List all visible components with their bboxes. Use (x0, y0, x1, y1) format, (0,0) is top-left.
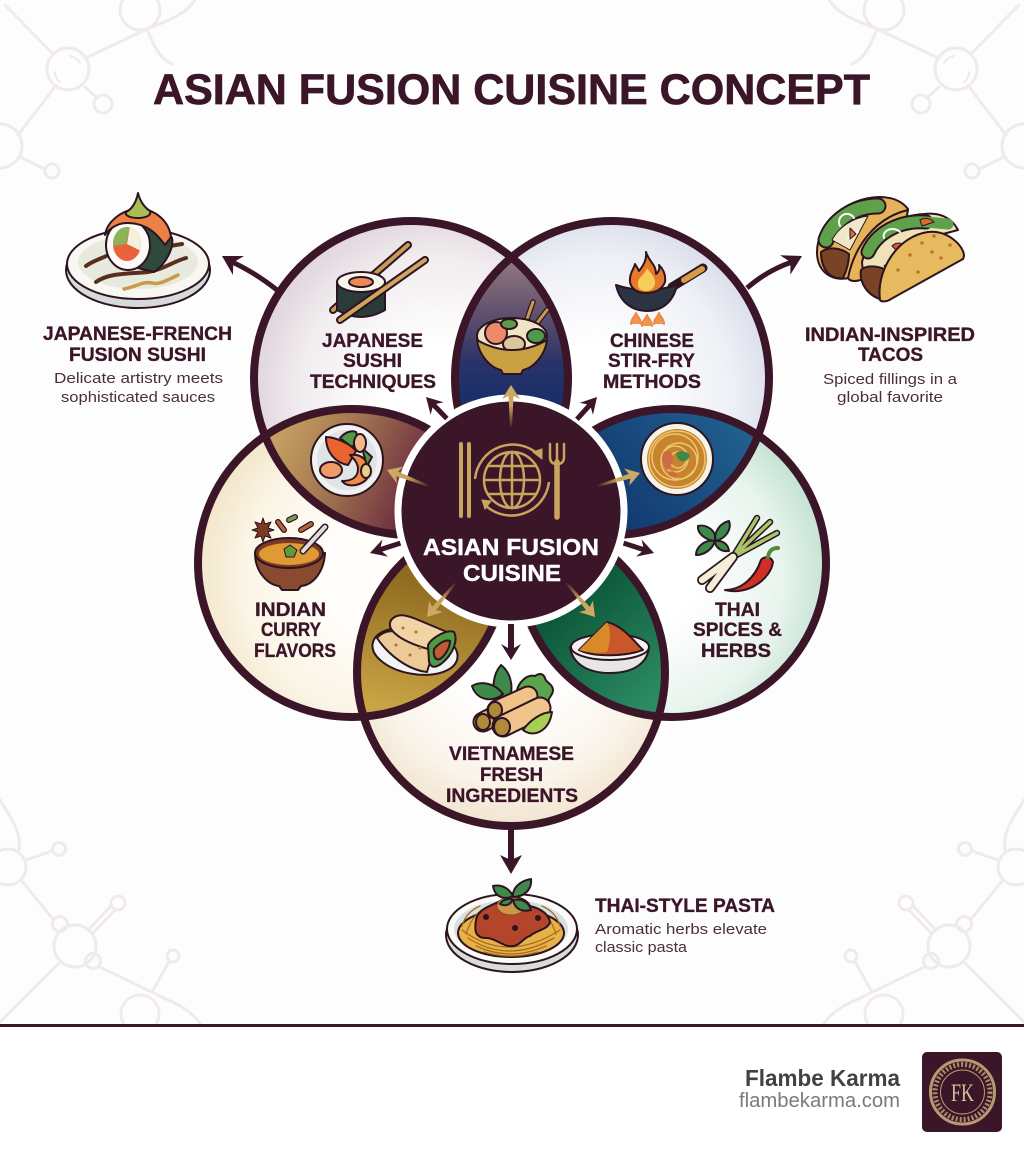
label (446, 743, 578, 807)
circle: Indian curry flavors (198, 409, 506, 717)
heading: TACOS (858, 344, 923, 366)
label (603, 330, 701, 393)
label: JAPANESE (322, 330, 423, 352)
arrows: dark arrows toward cuisines (367, 391, 657, 660)
overlap: Indian and Vietnamese (361, 564, 488, 712)
description: Aromatic herbs elevate (595, 921, 767, 938)
panel: Thai spices and herbs (693, 518, 782, 662)
circle outlines (198, 221, 826, 826)
icon: curry bowl with spices (252, 517, 325, 590)
icon: spring rolls with herbs and lime (472, 665, 553, 736)
description: global favorite (837, 389, 943, 406)
heading: JAPANESE-FRENCH (43, 323, 232, 345)
label: SUSHI (343, 350, 402, 372)
callout: Japanese-French fusion sushi (43, 193, 232, 406)
label: CHINESE (610, 330, 694, 352)
circle: Vietnamese fresh ingredients (357, 518, 665, 826)
description: classic pasta (595, 939, 688, 956)
icon: sushi roll and chopsticks (333, 245, 425, 320)
label (693, 599, 782, 662)
arrow: to Thai-style pasta (500, 826, 522, 874)
panel: Indian curry flavors (252, 517, 336, 662)
hub label: ASIAN FUSION (423, 534, 599, 560)
hub disc (398, 398, 624, 624)
label: FLAVORS (254, 640, 336, 662)
arrow: to Japanese-French fusion sushi (216, 246, 277, 290)
callout: Indian-inspired tacos (805, 197, 975, 406)
label: CURRY (261, 619, 321, 641)
label: INGREDIENTS (446, 785, 578, 807)
label: METHODS (603, 371, 701, 393)
brand name: Flambe Karma (745, 1065, 900, 1091)
callout: Thai-style pasta (446, 879, 775, 972)
panel: Chinese stir-fry methods (603, 252, 703, 393)
icon: wok with flames (616, 252, 703, 326)
overlap: Japanese and Chinese (459, 262, 564, 406)
icon: noodle bowl in Japanese-Chinese overlap (477, 302, 547, 374)
heading: FUSION SUSHI (69, 344, 206, 366)
brand url: flambekarma.com (739, 1090, 900, 1112)
footer bar (0, 1024, 1024, 1154)
description: Spiced fillings in a (823, 371, 958, 388)
label: THAI (715, 599, 760, 621)
description: sophisticated sauces (61, 389, 215, 406)
venn diagram of five cuisines (198, 221, 826, 826)
heading: THAI-STYLE PASTA (595, 895, 775, 917)
label: FRESH (480, 764, 543, 786)
icon: basil lemongrass and chili (696, 518, 778, 591)
icon: pasta plate with basil (446, 879, 578, 972)
arrows: gold arrows toward overlaps (384, 385, 643, 623)
description (595, 921, 767, 956)
label (310, 330, 436, 393)
circle: Japanese sushi techniques (254, 221, 568, 535)
icon: two tacos (817, 197, 964, 301)
central hub (398, 398, 624, 624)
icon: sushi on sauced plate (66, 193, 210, 308)
icon: shrimp plate in Japanese-Indian overlap (311, 424, 383, 496)
description (54, 370, 223, 406)
logo: FK (951, 1080, 974, 1107)
icon: noodle plate in Chinese-Thai overlap (641, 423, 713, 495)
label: STIR-FRY (608, 350, 695, 372)
icon: wrap on plate in Indian-Vietnamese overlap (369, 615, 461, 681)
panel: Vietnamese fresh ingredients (446, 665, 578, 807)
label: VIETNAMESE (449, 743, 574, 765)
icon: spice bowl in Thai-Vietnamese overlap (570, 622, 649, 673)
circle: Chinese stir-fry methods (455, 221, 769, 535)
icon: chopsticks fork and globe (461, 444, 564, 517)
overlap: Japanese and Indian (270, 413, 426, 530)
panel: Japanese sushi techniques (310, 245, 436, 393)
overlap: Chinese and Thai (597, 413, 754, 530)
heading (43, 323, 232, 366)
heading: INDIAN-INSPIRED (805, 324, 975, 346)
description (823, 371, 958, 406)
label: INDIAN (255, 599, 326, 621)
hub label: CUISINE (463, 560, 561, 586)
logo (922, 1052, 1002, 1132)
label (254, 599, 336, 662)
overlap: Thai and Vietnamese (536, 564, 661, 712)
arrow: to Indian-inspired tacos (747, 246, 807, 288)
description: Delicate artistry meets (54, 370, 223, 387)
hub label (423, 534, 599, 586)
heading (805, 324, 975, 366)
label: TECHNIQUES (310, 371, 436, 393)
circle: Thai spices and herbs (518, 409, 826, 717)
label: SPICES & (693, 619, 782, 641)
label: HERBS (701, 640, 771, 662)
title: ASIAN FUSION CUISINE CONCEPT (153, 66, 870, 114)
